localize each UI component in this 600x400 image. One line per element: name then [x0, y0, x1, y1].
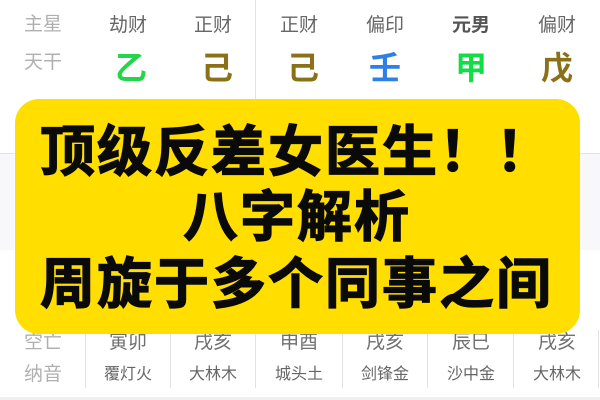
void: 寅卯: 寅卯 [109, 332, 147, 353]
nayin: 城头土: 城头土 [275, 366, 323, 383]
stem: 己: 己 [201, 50, 233, 86]
void: 戌亥: 戌亥 [366, 332, 404, 353]
title line 2: 八字解析 [183, 186, 411, 248]
panel: yellow title card [15, 99, 580, 334]
nayin: 沙中金: 沙中金 [447, 366, 495, 383]
row label: 主星: 主星 [24, 14, 62, 35]
bottom footer strip [0, 397, 600, 400]
main star: 正财: 正财 [194, 15, 232, 36]
title line 1: 顶级反差女医生！！ [40, 121, 553, 183]
nayin: 覆灯火: 覆灯火 [104, 366, 152, 383]
void: 戌亥: 戌亥 [538, 332, 576, 353]
stem: 己: 己 [287, 50, 319, 86]
main star: 偏财: 偏财 [538, 15, 576, 36]
void: 辰巳: 辰巳 [452, 332, 490, 353]
stem: 戊: 戊 [541, 50, 573, 86]
nayin: 大林木: 大林木 [533, 366, 581, 383]
top table: chart rows [24, 0, 576, 99]
nayin: 大林木: 大林木 [189, 366, 237, 383]
main star: 正财: 正财 [280, 15, 318, 36]
void: 申酉: 申酉 [280, 332, 318, 353]
bottom table: chart rows [24, 330, 599, 388]
row label: 纳音: 纳音 [24, 364, 62, 385]
row label: 天干: 天干 [24, 52, 62, 73]
stem: 壬: 壬 [369, 50, 401, 86]
stem: 乙: 乙 [115, 50, 147, 86]
nayin: 剑锋金: 剑锋金 [361, 366, 409, 383]
main star: 元男: 元男 [452, 15, 490, 36]
row label: 空亡: 空亡 [24, 332, 62, 353]
void: 戌亥: 戌亥 [194, 332, 232, 353]
title line 3: 周旋于多个同事之间 [40, 253, 553, 315]
main star: 偏印: 偏印 [366, 15, 404, 36]
main star: 劫财: 劫财 [109, 15, 147, 36]
background band [0, 153, 600, 250]
stem: 甲: 甲 [455, 50, 487, 86]
